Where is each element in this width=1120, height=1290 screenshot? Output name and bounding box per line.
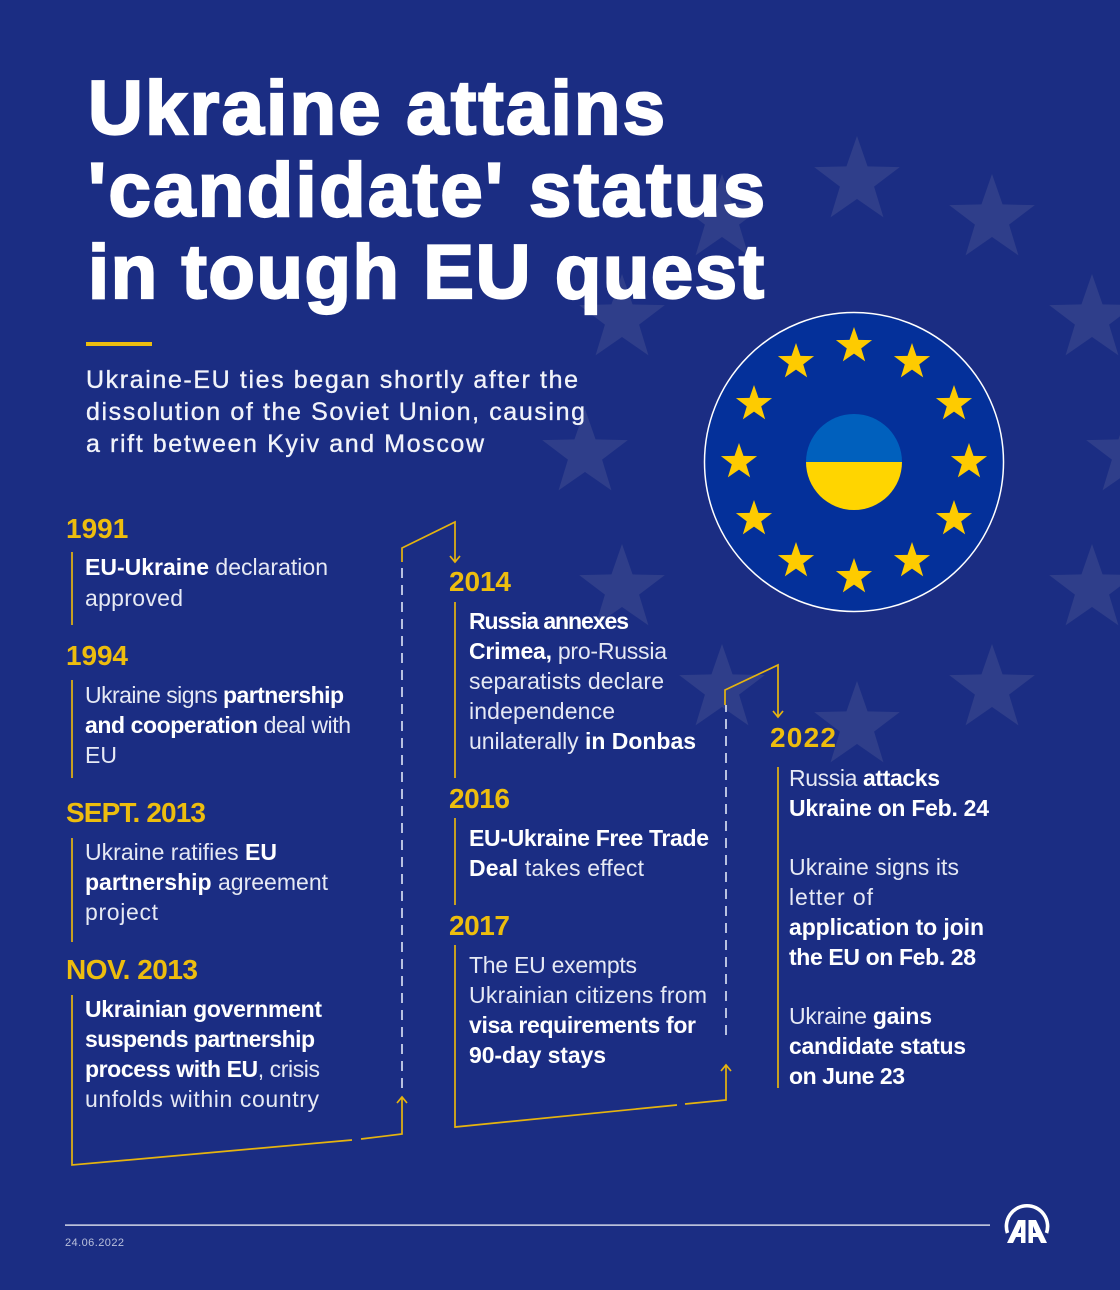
icon: EU and Ukraine flag circle [704, 312, 1004, 612]
timeline column 3: 2022: on June 23 [789, 1063, 905, 1089]
timeline column 3: 2022: Russia attacks [789, 765, 940, 791]
entry: Nov. 2013: unfolds within country [85, 1086, 320, 1112]
entry: 2016: 2016 [449, 783, 510, 814]
entry: 1994: 1994 [66, 640, 128, 671]
entry: Nov. 2013: NOV. 2013 [66, 954, 198, 985]
entry: 2014: Russia annexes [469, 608, 629, 634]
entry: 1994: and cooperation deal with [85, 712, 351, 738]
timeline column 3: 2022: letter of [789, 884, 874, 910]
subtitle: Ukraine-EU ties began shortly after the [86, 366, 578, 394]
timeline column 3: 2022: candidate status [789, 1033, 966, 1059]
entry: 2014: separatists declare [469, 668, 664, 694]
entry: 1991: 1991 [66, 513, 128, 544]
entry: 2017 [449, 910, 707, 1068]
date: 24.06.2022 [65, 1237, 124, 1249]
entry: 2017: 90-day stays [469, 1042, 606, 1068]
entry: Sept. 2013: partnership agreement [85, 869, 329, 895]
entry: 2017: 2017 [449, 910, 510, 941]
timeline column 3: 2022: Ukraine signs its [789, 854, 959, 880]
entry: Sept. 2013: project [85, 899, 159, 925]
arrow: column 1 to column 2 [72, 522, 460, 1165]
entry: Sept. 2013 [66, 797, 329, 942]
timeline column 3: 2022: Ukraine gains [789, 1003, 932, 1029]
entry: Nov. 2013: suspends partnership [85, 1026, 315, 1052]
entry: 2014: 2014 [449, 566, 511, 597]
timeline column 3: 2022 [770, 722, 989, 1089]
timeline column 1 [66, 513, 351, 1112]
title: 'candidate' status [88, 148, 765, 233]
entry: 2014: independence [469, 698, 615, 724]
entry: 2014 [449, 566, 696, 778]
entry: 1991 [66, 513, 328, 625]
subtitle [86, 366, 585, 458]
timeline column 3: 2022: 2022 [770, 722, 836, 753]
title: in tough EU quest [88, 230, 764, 315]
entry: 2017: Ukrainian citizens from [469, 982, 707, 1008]
entry: Sept. 2013: SEPT. 2013 [66, 797, 206, 828]
entry: 1994: Ukraine signs partnership [85, 682, 344, 708]
entry: Nov. 2013: Ukrainian government [85, 996, 322, 1022]
timeline column 3: 2022: application to join [789, 914, 984, 940]
entry: 1991: approved [85, 585, 183, 611]
entry: Nov. 2013: process with EU, crisis [85, 1056, 320, 1082]
entry: 1991: EU-Ukraine declaration [85, 554, 328, 580]
entry: 2016 [449, 783, 709, 905]
entry: 1994 [66, 640, 351, 778]
background faint EU stars [542, 136, 1120, 762]
footer rule [65, 1224, 990, 1226]
entry: 2016: Deal takes effect [469, 855, 645, 881]
entry: 2017: The EU exempts [469, 952, 637, 978]
entry: 2014: Crimea, pro-Russia [469, 638, 667, 664]
title [88, 66, 765, 315]
subtitle: dissolution of the Soviet Union, causing [86, 398, 585, 426]
entry: 2017: visa requirements for [469, 1012, 696, 1038]
timeline column 3: 2022: Ukraine on Feb. 24 [789, 795, 989, 821]
entry: 2016: EU-Ukraine Free Trade [469, 825, 709, 851]
timeline column 3: 2022: the EU on Feb. 28 [789, 944, 976, 970]
entry: 1994: EU [85, 742, 117, 768]
arrow: column 2 to column 3 [455, 665, 783, 1127]
icon: AA logo [1006, 1206, 1048, 1243]
timeline column 2 [449, 566, 709, 1068]
entry: Nov. 2013 [66, 954, 322, 1112]
subtitle: a rift between Kyiv and Moscow [86, 430, 485, 458]
entry: 2014: unilaterally in Donbas [469, 728, 696, 754]
title: Ukraine attains [88, 66, 665, 151]
title accent rule [86, 342, 152, 346]
entry: Sept. 2013: Ukraine ratifies EU [85, 839, 277, 865]
